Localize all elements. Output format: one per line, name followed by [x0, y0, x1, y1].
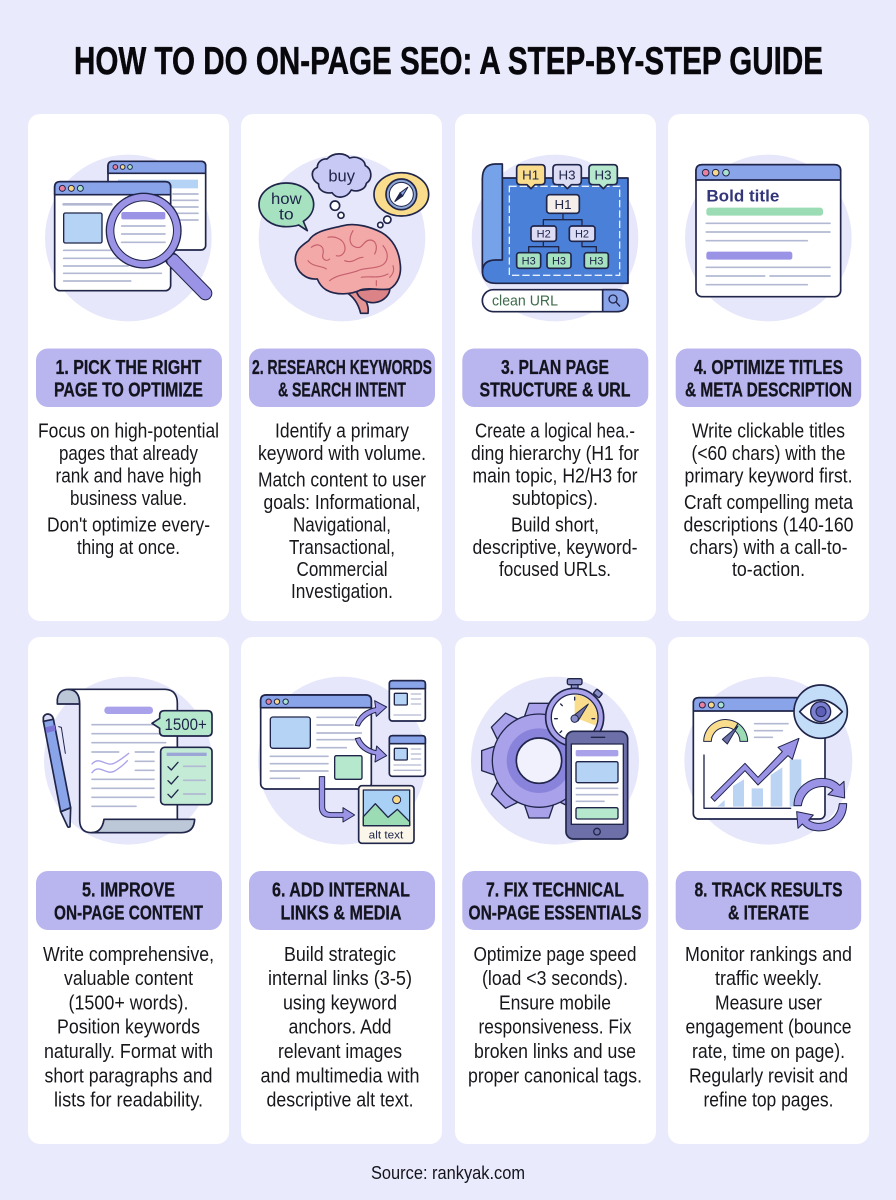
text block: Transactional, [289, 537, 395, 559]
text block: (1500+ words). [68, 992, 188, 1014]
heading [676, 348, 861, 407]
text block: goals: Informational, [264, 492, 420, 514]
text block: primary keyword first. [684, 466, 852, 488]
icon: document scroll, pen and checklist [43, 677, 212, 845]
text block: proper canonical tags. [468, 1065, 642, 1087]
heading [676, 871, 861, 930]
icon: document scroll, pen and checklist: 1500+ [164, 715, 207, 734]
icon: internal links and media [258, 677, 426, 845]
text block [684, 420, 854, 581]
text block: Match content to user [258, 470, 426, 492]
icon: brain with search intent bubbles: buy [328, 166, 356, 185]
heading: 2. RESEARCH KEYWORDS [252, 356, 432, 379]
text block: and multimedia with [260, 1065, 420, 1087]
text block: descriptive, keyword- [472, 537, 638, 559]
text block: Focus on high-potential [38, 420, 219, 442]
text block: chars) with a call-to- [690, 537, 848, 559]
text block: rank and have high [56, 466, 202, 488]
heading: 7. FIX TECHNICAL [486, 879, 624, 902]
panel: step 2 [241, 114, 442, 621]
heading [249, 871, 435, 930]
text block: Monitor rankings and [685, 944, 852, 966]
text block: lists for readability. [54, 1090, 203, 1112]
text block: Measure user [715, 992, 822, 1014]
heading: STRUCTURE & URL [480, 379, 630, 402]
text block: responsiveness. Fix [478, 1017, 632, 1039]
icon: gear, stopwatch and phone [471, 677, 639, 845]
text block: main topic, H2/H3 for [472, 466, 638, 488]
icon: blueprint site structure and clean URL: H2 [537, 229, 551, 241]
text block: Navigational, [293, 515, 391, 537]
heading: PAGE TO OPTIMIZE [54, 379, 203, 402]
text block: Don't optimize every- [47, 515, 210, 537]
heading: ON-PAGE ESSENTIALS [468, 901, 642, 924]
text block: rate, time on page). [692, 1041, 845, 1063]
text block: Position keywords [57, 1017, 200, 1039]
icon: brain with search intent bubbles [259, 154, 429, 321]
text block: anchors. Add [288, 1017, 392, 1039]
text block: Write comprehensive, [43, 944, 214, 966]
text block: Build strategic [284, 944, 396, 966]
text block: Build short, [511, 515, 599, 537]
text block: Write clickable titles [692, 420, 845, 442]
heading [36, 348, 222, 407]
text block: descriptions (140-160 [684, 515, 854, 537]
text block: naturally. Format with [44, 1041, 213, 1063]
text block: Craft compelling meta [684, 492, 854, 514]
icon: page with bold title and meta description: Bold title [706, 187, 779, 206]
text block [38, 420, 219, 559]
icon: blueprint site structure and clean URL: clean URL [492, 294, 558, 310]
text block: broken links and use [474, 1041, 636, 1063]
text block: Regularly revisit and [689, 1065, 848, 1087]
text block: to-action. [732, 559, 805, 581]
icon: brain with search intent bubbles: to [279, 206, 294, 223]
text block: Identify a primary [275, 420, 409, 442]
panel: step 5 [28, 637, 229, 1144]
text block: internal links (3-5) [268, 968, 412, 990]
heading: 3. PLAN PAGE [501, 356, 609, 379]
text block: descriptive alt text. [266, 1090, 414, 1112]
icon: blueprint site structure and clean URL [472, 155, 638, 321]
text block [685, 944, 852, 1112]
heading [36, 871, 222, 930]
text block: Investigation. [291, 581, 393, 603]
text block: relevant images [278, 1041, 402, 1063]
heading: LINKS & MEDIA [280, 901, 402, 924]
heading: 4. OPTIMIZE TITLES [694, 356, 843, 379]
text block: subtopics). [512, 488, 598, 510]
text block: refine top pages. [704, 1090, 834, 1112]
text block: Create a logical hea.- [475, 420, 635, 442]
text block: Commercial [296, 559, 388, 581]
icon: page with bold title and meta description [685, 155, 852, 321]
panel: step 4 [668, 114, 869, 621]
heading: 8. TRACK RESULTS [694, 879, 842, 902]
icon: blueprint site structure and clean URL: H3 [552, 255, 566, 267]
heading: 5. IMPROVE [82, 879, 175, 902]
icon: blueprint site structure and clean URL: H3 [589, 255, 603, 267]
icon: pages with magnifying glass [45, 155, 212, 321]
text block: using keyword [283, 992, 397, 1014]
panel: step 6 [241, 637, 442, 1144]
heading [462, 871, 648, 930]
icon: brain with search intent bubbles: how [271, 191, 302, 208]
text block: ding hierarchy (H1 for [471, 443, 639, 465]
text block: pages that already [59, 443, 198, 465]
panel: step 3 [455, 114, 656, 621]
icon: blueprint site structure and clean URL: H1 [554, 197, 572, 212]
text block [468, 944, 642, 1087]
text block: (load <3 seconds). [482, 968, 628, 990]
heading: & SEARCH INTENT [278, 379, 406, 402]
text block: engagement (bounce [686, 1017, 852, 1039]
text block [471, 420, 639, 581]
icon: analytics dashboard with eye and refresh [684, 677, 852, 845]
text block [43, 944, 214, 1112]
text block: (<60 chars) with the [692, 443, 846, 465]
text block: short paragraphs and [44, 1065, 212, 1087]
text block: focused URLs. [499, 559, 611, 581]
panel: step 1 [28, 114, 229, 621]
heading [462, 348, 648, 407]
heading: ON-PAGE CONTENT [54, 901, 203, 924]
text block: Optimize page speed [474, 944, 636, 966]
icon: blueprint site structure and clean URL: H1 [522, 168, 539, 183]
text block: thing at once. [77, 537, 180, 559]
icon: blueprint site structure and clean URL: H3 [594, 168, 612, 183]
text block: keyword with volume. [258, 443, 426, 465]
panel: step 7 [455, 637, 656, 1144]
icon: blueprint site structure and clean URL: H3 [522, 255, 536, 267]
text block [260, 944, 420, 1112]
heading: & ITERATE [728, 901, 809, 924]
icon: blueprint site structure and clean URL: H3 [558, 168, 576, 183]
text block: traffic weekly. [715, 968, 822, 990]
panel: step 8 [668, 637, 869, 1144]
heading [249, 348, 435, 407]
text block [258, 420, 426, 603]
heading: 6. ADD INTERNAL [272, 879, 410, 902]
icon: blueprint site structure and clean URL: H2 [575, 229, 589, 241]
text block: Ensure mobile [499, 992, 611, 1014]
heading: 1. PICK THE RIGHT [56, 356, 202, 379]
text block: valuable content [64, 968, 193, 990]
text block: business value. [70, 488, 187, 510]
icon: internal links and media: alt text [369, 830, 404, 842]
source footer: Source: rankyak.com [371, 1163, 525, 1183]
